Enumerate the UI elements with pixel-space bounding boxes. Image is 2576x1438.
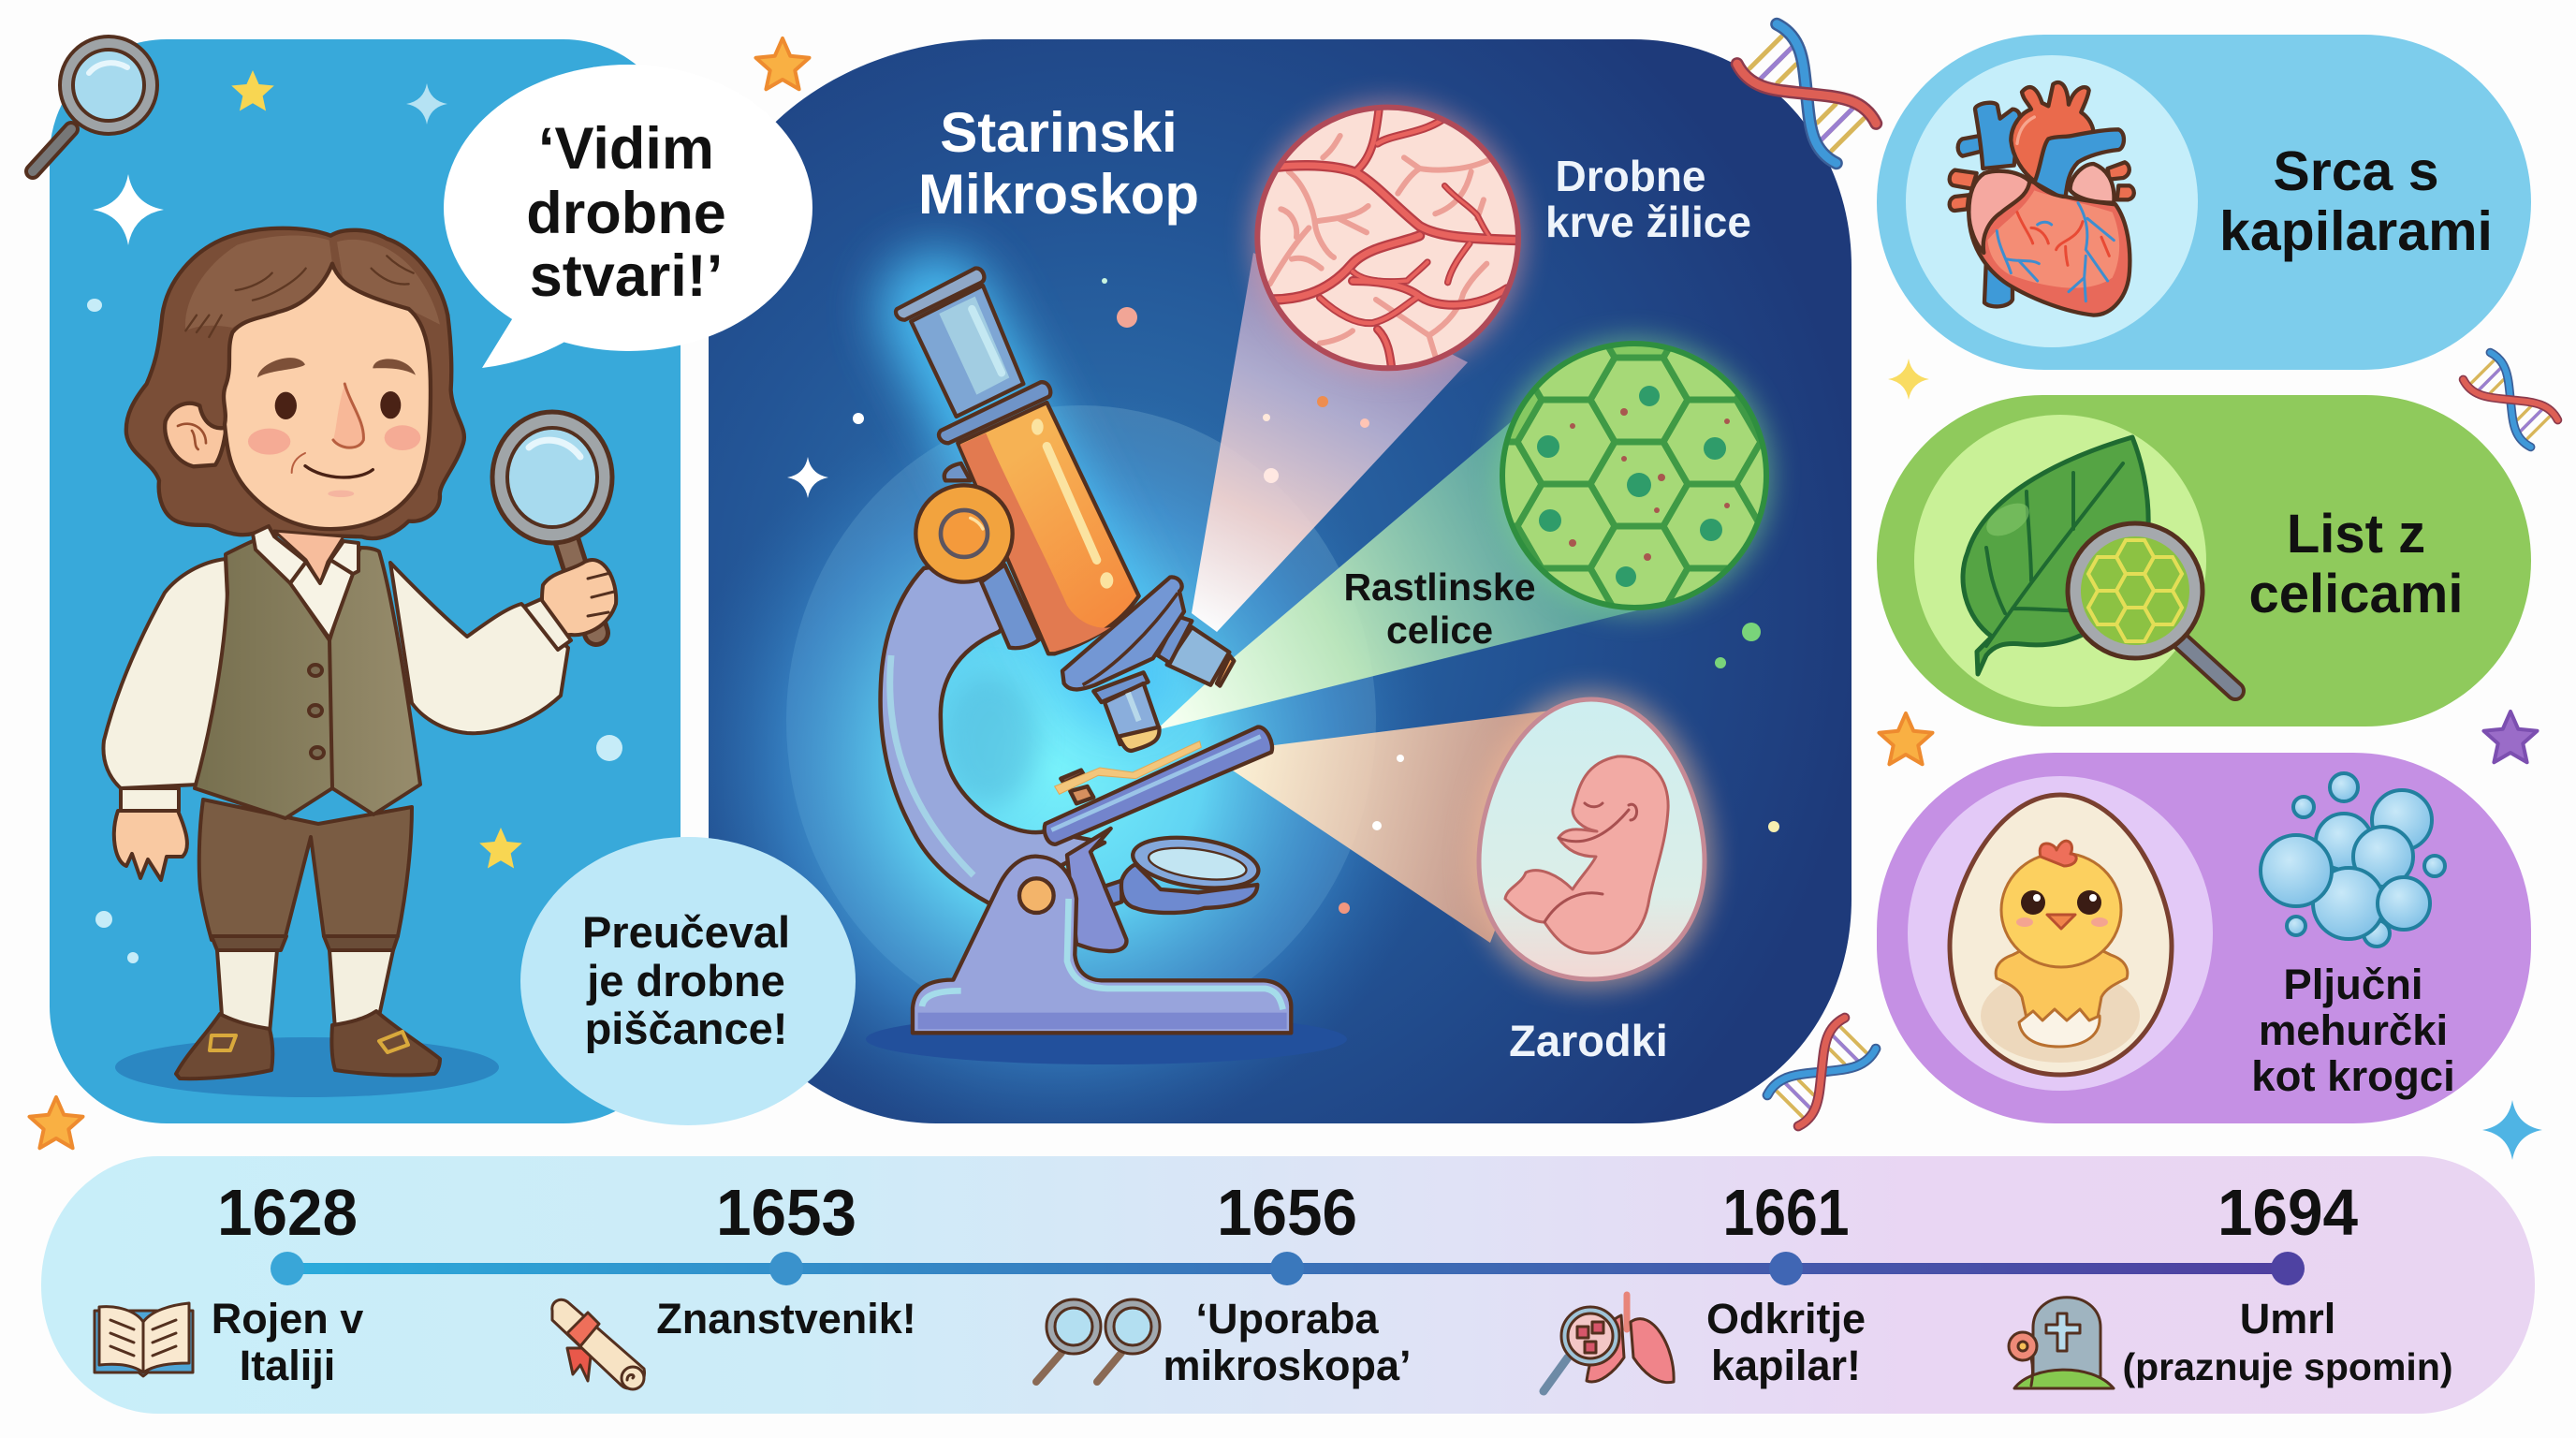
icon: leaf magnifier <box>2068 523 2235 691</box>
trouser bands <box>212 936 398 950</box>
milestone: 1661 <box>1544 1176 1866 1391</box>
label: heart: kapilarami <box>2219 200 2493 262</box>
shoes <box>176 1014 272 1078</box>
hair strands <box>185 256 414 337</box>
right objective ring <box>1158 616 1192 663</box>
mouth <box>305 466 373 477</box>
label: leaf: List z <box>2287 504 2425 565</box>
icon: yellow star <box>231 70 274 110</box>
decoration: DNA strands <box>1735 22 2559 1127</box>
nosepiece <box>1062 577 1184 689</box>
egg shell <box>2019 1009 2100 1047</box>
icon: sparkle <box>787 457 828 498</box>
eyebrows <box>257 358 305 377</box>
speech bubble: stvari!’ <box>530 243 723 309</box>
panel: microscope <box>674 39 1852 1152</box>
decoration: stars and sparkles <box>30 38 2542 1160</box>
stage pin <box>1070 786 1093 803</box>
milestone: 1653: 1653 <box>716 1176 856 1249</box>
icon: heart <box>1950 82 2134 315</box>
collar flaps <box>253 526 306 583</box>
label: embryos: Zarodki <box>1509 1016 1668 1065</box>
label: lung bubbles <box>2251 961 2455 1100</box>
hair <box>126 228 464 538</box>
pivot knob <box>1019 878 1054 913</box>
label: lung bubbles: Pljučni <box>2283 961 2423 1008</box>
holding fist <box>542 560 616 635</box>
milestone: 1661: 1661 <box>1722 1176 1850 1249</box>
neck <box>274 531 344 583</box>
icon: pale sparkle <box>406 83 447 125</box>
panel: heart with capillaries <box>1877 35 2531 370</box>
label: blood vessels: Drobne <box>1556 152 1705 200</box>
speech bubble: drobne <box>526 181 726 246</box>
lower section <box>913 672 1291 1033</box>
microscope <box>866 269 1347 1064</box>
timeline axis <box>287 1263 2288 1274</box>
milestone: 1656 <box>1036 1176 1412 1389</box>
left hand <box>114 811 187 880</box>
title: Starinski <box>940 101 1178 164</box>
lower objective collar <box>1093 672 1149 702</box>
mirror lens <box>1147 843 1249 885</box>
icon: open book <box>95 1303 193 1376</box>
stage <box>1045 727 1272 844</box>
circle: plant cells <box>1486 322 1788 629</box>
icon: yellow star lower <box>479 828 522 868</box>
label: lung bubbles: mehurčki <box>2259 1006 2448 1054</box>
label: plant cells: celice <box>1386 609 1493 652</box>
left sleeve <box>103 559 227 788</box>
label: lung bubbles: kot krogci <box>2251 1052 2455 1100</box>
eyepiece cap <box>896 269 984 320</box>
label: leaf: celicami <box>2249 564 2463 624</box>
icon: chick in egg <box>1950 795 2172 1075</box>
milestone: 1694: (praznuje spomin) <box>2122 1345 2453 1388</box>
icon: lung bubbles <box>2261 773 2445 946</box>
side tube <box>981 565 1039 648</box>
right sleeve <box>390 563 568 733</box>
milestone: 1661: kapilar! <box>1711 1342 1861 1389</box>
back bracket <box>944 463 971 480</box>
icon: two magnifiers <box>1036 1299 1160 1382</box>
milestone: 1628: Italiji <box>240 1342 335 1389</box>
milestone: 1653: Znanstvenik! <box>656 1295 916 1343</box>
light beam: vessels <box>1192 253 1468 632</box>
decorative dots <box>87 299 622 963</box>
right cuff <box>524 599 571 650</box>
glow behind microscope <box>674 309 1442 1152</box>
strut <box>1067 829 1126 951</box>
floor shadow <box>115 1037 499 1097</box>
label: leaf <box>2249 504 2463 624</box>
mirror disc <box>1130 830 1262 895</box>
timeline dots <box>271 1252 2305 1285</box>
embryo figure <box>1505 756 1668 953</box>
socks <box>217 950 277 1033</box>
hand magnifier <box>565 536 596 633</box>
callout: chicks <box>520 837 856 1125</box>
mirror bracket <box>1105 881 1121 905</box>
right objective tube <box>1167 627 1229 685</box>
icon: diploma <box>552 1299 645 1389</box>
milestone: 1628: 1628 <box>217 1176 358 1249</box>
light beam: embryos <box>1208 707 1580 943</box>
tube collar <box>939 382 1050 443</box>
milestone: 1694: 1694 <box>2217 1176 2358 1249</box>
icon: corner magnifier <box>33 37 157 171</box>
title <box>918 101 1199 226</box>
face <box>224 264 431 529</box>
focus knob <box>915 485 1013 582</box>
lower objective tube <box>1105 683 1159 744</box>
light beam: cells <box>1156 420 1641 730</box>
callout: chicks: piščance! <box>585 1004 787 1053</box>
eyes <box>275 392 297 419</box>
callout: chicks: je drobne <box>586 956 785 1005</box>
shirt front <box>290 560 353 638</box>
milestone: 1656: 1656 <box>1217 1176 1357 1249</box>
icon: white sparkle <box>93 174 164 245</box>
milestone: 1656: mikroskopa’ <box>1163 1342 1412 1389</box>
character: Malpighi <box>103 228 616 1078</box>
pillar and foot <box>913 857 1291 1033</box>
panel: leaf with cells <box>1877 395 2531 726</box>
chick head <box>2001 853 2121 967</box>
upper section <box>896 269 1234 689</box>
label: heart <box>2219 140 2493 262</box>
icon: lungs and magnifier <box>1544 1295 1674 1391</box>
icon: gravestone <box>2009 1298 2114 1388</box>
left cuff <box>121 788 179 811</box>
milestone: 1628 <box>95 1176 363 1389</box>
nose <box>333 384 363 448</box>
label: blood vessels: krve žilice <box>1545 198 1751 246</box>
timeline <box>41 1156 2535 1414</box>
buttons <box>309 665 322 676</box>
trousers <box>199 800 412 940</box>
label: blood vessels <box>1545 152 1751 246</box>
ear <box>165 404 227 466</box>
egg: embryo <box>1471 691 1713 989</box>
milestone: 1694 <box>2009 1176 2453 1388</box>
vest <box>195 538 420 818</box>
base shadow <box>866 1014 1347 1064</box>
label: plant cells: Rastlinske <box>1343 565 1536 609</box>
speech bubble: ‘Vidim <box>538 116 714 182</box>
milestone: 1656: ‘Uporaba <box>1195 1295 1379 1343</box>
lower objective tip <box>1119 727 1160 751</box>
panel: chick and lung bubbles <box>1877 753 2531 1123</box>
body tube <box>958 403 1139 653</box>
mirror base <box>1121 864 1257 913</box>
stage clip <box>1055 741 1201 794</box>
milestone: 1694: Umrl <box>2240 1295 2335 1343</box>
arm <box>881 562 1105 903</box>
speech bubble <box>444 65 812 368</box>
callout: chicks: Preučeval <box>582 907 790 957</box>
panel: scientist portrait <box>50 39 681 1123</box>
icon: leaf <box>1963 437 2148 674</box>
milestone: 1628: Rojen v <box>212 1295 363 1343</box>
head <box>165 256 431 529</box>
label: heart: Srca s <box>2273 140 2439 202</box>
milestone: 1653 <box>552 1176 916 1389</box>
label: plant cells <box>1343 565 1536 652</box>
circle: blood vessels <box>1251 101 1525 374</box>
chick body <box>1996 950 2128 1022</box>
title: Mikroskop <box>918 163 1199 226</box>
eyepiece tube <box>911 286 1023 417</box>
floating particles <box>853 278 1779 914</box>
cheeks <box>248 429 290 455</box>
milestone: 1661: Odkritje <box>1706 1295 1866 1343</box>
